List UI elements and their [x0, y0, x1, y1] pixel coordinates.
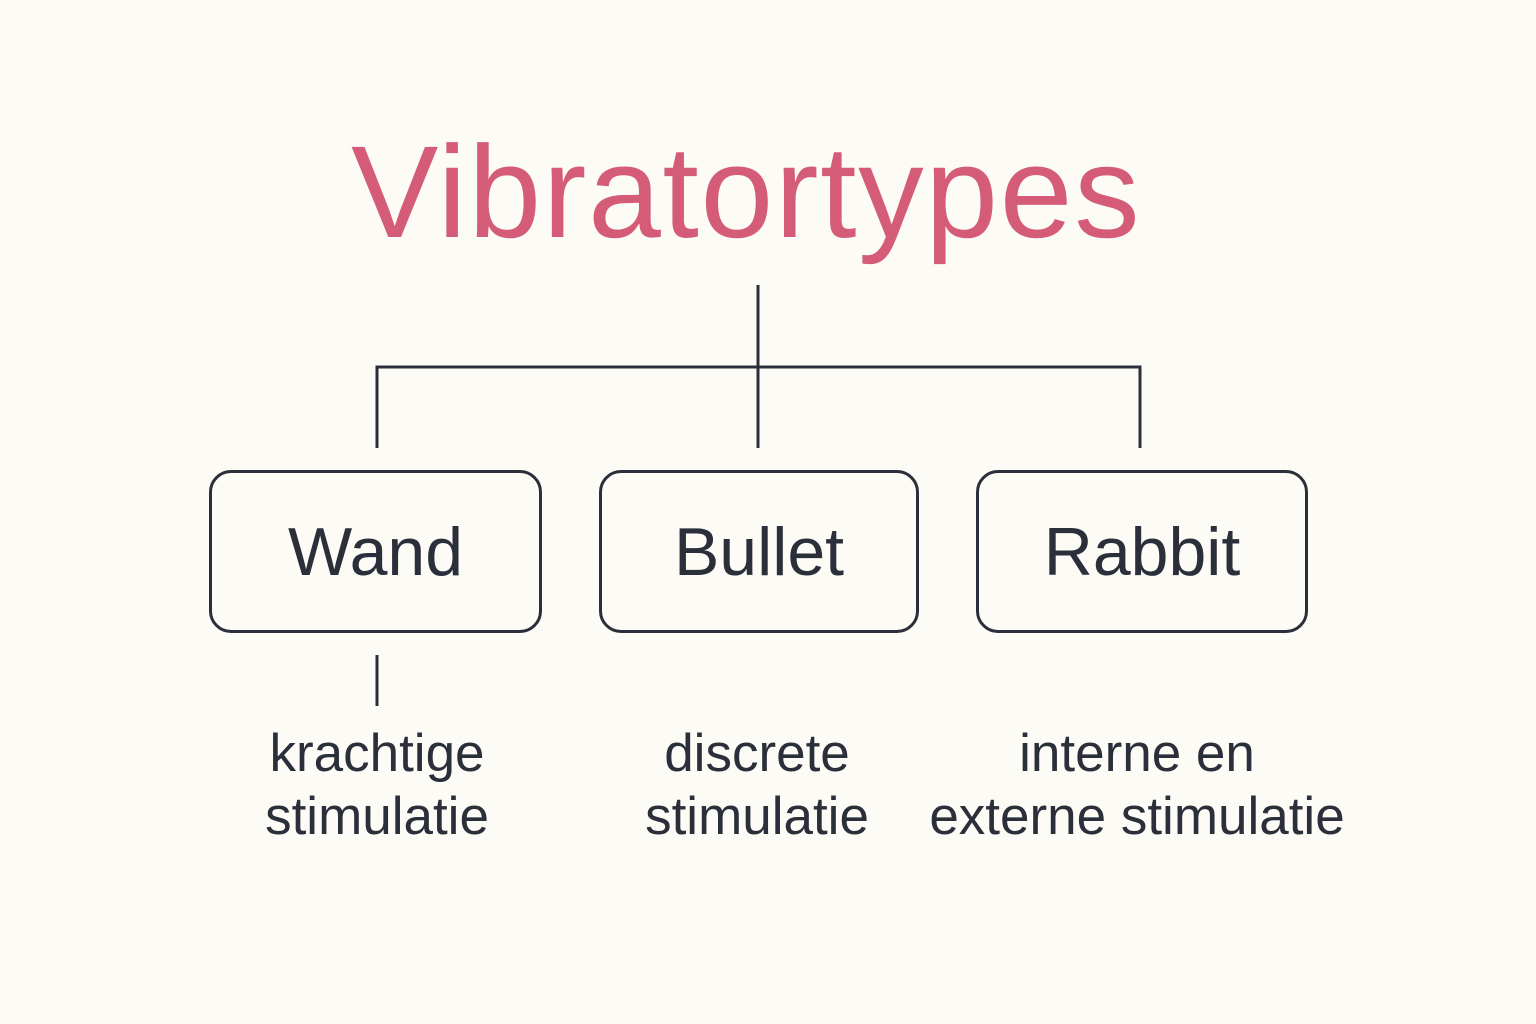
description: Rabbit: [929, 724, 1345, 846]
description: Wand: stimulatie: [265, 787, 489, 846]
box: Wand: Wand: [288, 514, 463, 590]
description: Bullet: [645, 724, 869, 846]
description: Wand: [265, 724, 489, 846]
description: Wand: krachtige: [269, 724, 485, 783]
description: Rabbit: interne en: [1019, 724, 1255, 783]
box: Bullet: [599, 470, 919, 633]
description: Bullet: stimulatie: [645, 787, 869, 846]
description: Rabbit: externe stimulatie: [929, 787, 1345, 846]
description: Bullet: discrete: [664, 724, 850, 783]
title: Vibratortypes: [351, 118, 1141, 265]
box: Bullet: Bullet: [674, 514, 844, 590]
box: Wand: [209, 470, 542, 633]
box: Rabbit: [976, 470, 1308, 633]
box: Rabbit: Rabbit: [1044, 514, 1240, 590]
